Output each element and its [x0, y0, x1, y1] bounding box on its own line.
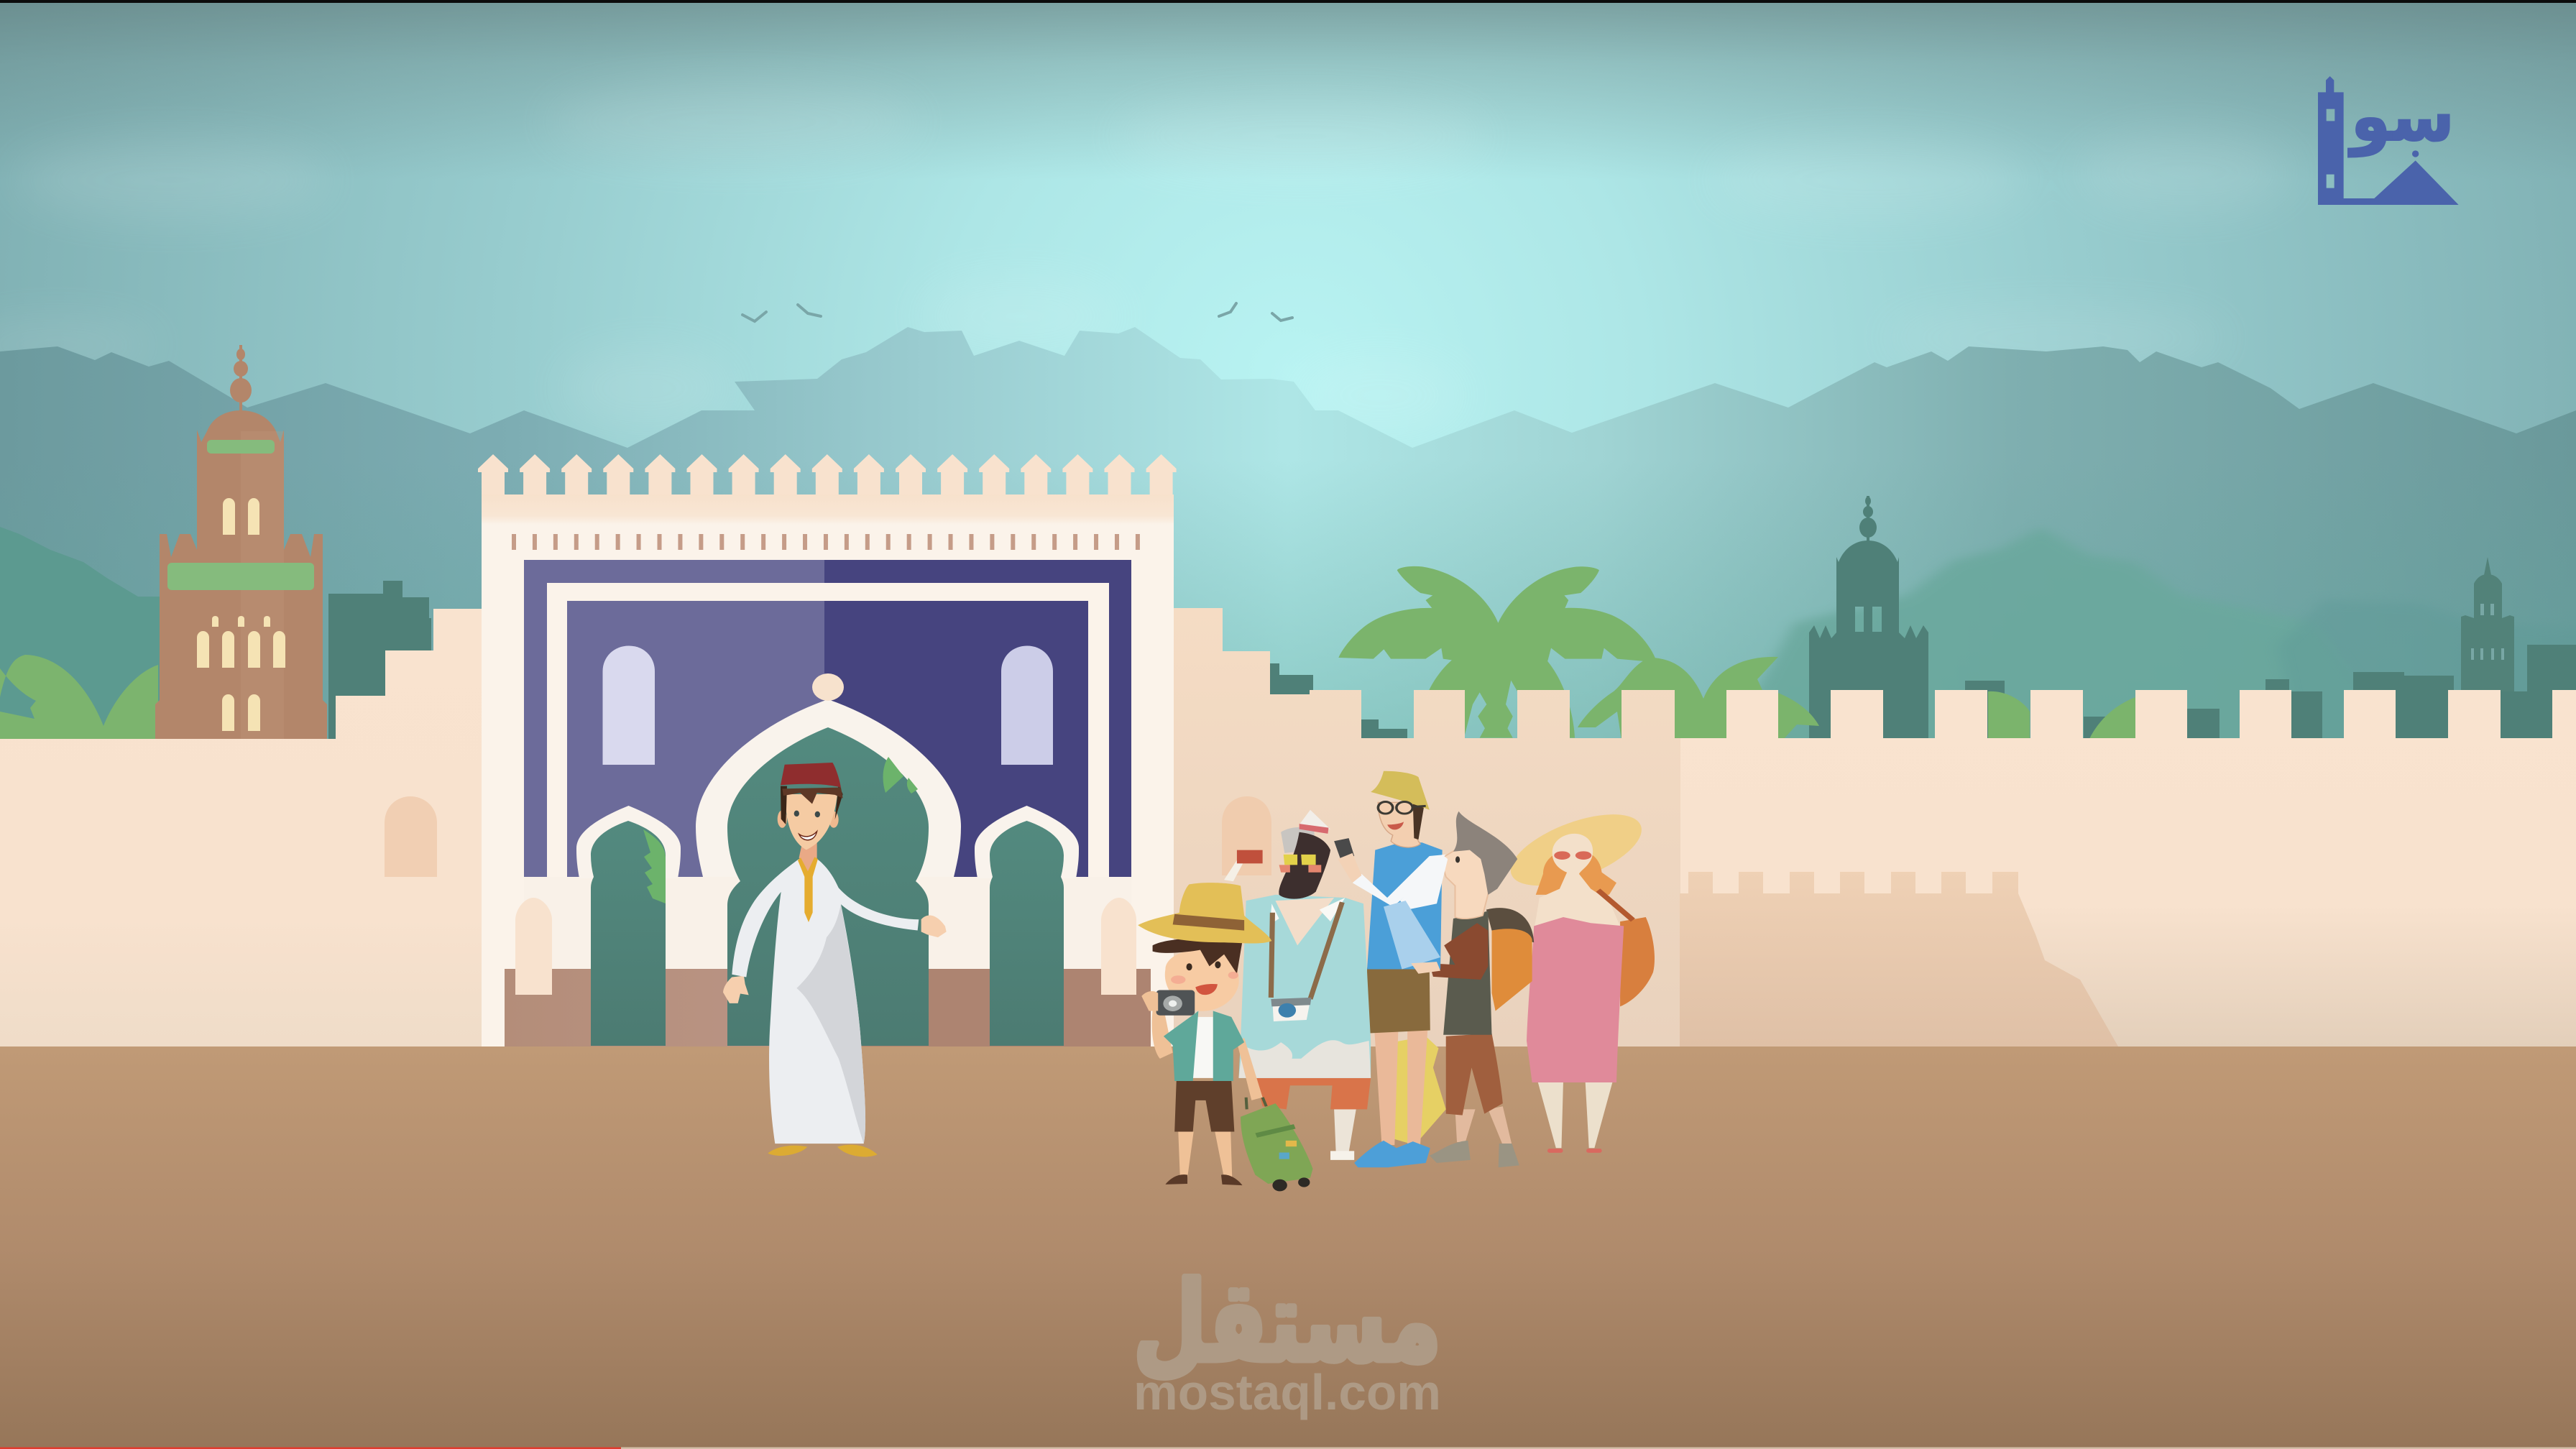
logo lettering: سو	[2348, 75, 2455, 157]
far right wall	[1653, 690, 2576, 1046]
tour guide	[723, 763, 947, 1157]
leaf in central doorway	[883, 757, 918, 794]
left palm leaves	[0, 655, 158, 740]
left doorway	[591, 821, 666, 1046]
gate niches	[515, 898, 1136, 995]
left wall	[0, 609, 489, 1046]
silhouette minaret far right	[2461, 557, 2514, 719]
tower body	[155, 410, 327, 739]
windows	[197, 498, 285, 731]
head	[778, 785, 843, 850]
fez hat	[781, 763, 841, 787]
second palm tree	[1578, 657, 1819, 740]
ground	[0, 1046, 2576, 1449]
hands	[723, 915, 947, 1003]
gate body	[482, 520, 1174, 1046]
mountain haze	[0, 460, 2576, 748]
watermark arabic: مستقل	[1133, 1259, 1441, 1386]
distant mountains	[0, 327, 2576, 791]
central arch	[524, 673, 1131, 969]
skyline buildings right	[1270, 645, 2576, 740]
yellow scarf	[1393, 1036, 1446, 1145]
cornice	[482, 494, 1174, 525]
shoes	[768, 1145, 878, 1157]
frieze ticks	[512, 534, 1140, 550]
bearded man	[1224, 810, 1371, 1160]
leaf in left doorway	[643, 829, 666, 903]
brown base	[505, 969, 1151, 1046]
backpacker	[1430, 811, 1534, 1167]
central doorway	[727, 727, 929, 1046]
watermark latin: mostaql.com	[1133, 1364, 1441, 1420]
suitcase	[1246, 1098, 1266, 1109]
logo	[2318, 75, 2459, 205]
niche right	[1222, 796, 1271, 875]
blue panel	[524, 560, 1131, 877]
video progress bar	[0, 1448, 2576, 1449]
niche left	[385, 796, 437, 877]
tourist group	[1138, 771, 1655, 1191]
side arch frames	[576, 806, 1079, 878]
birds	[742, 303, 1292, 321]
right doorway	[990, 821, 1064, 1046]
watermark	[1133, 1259, 1441, 1420]
right wall darker section	[1164, 608, 1680, 1046]
large palm tree	[1338, 566, 1655, 738]
green foothills left	[0, 527, 172, 748]
logo tower and roof	[2318, 76, 2459, 205]
green foothills right	[1712, 528, 2576, 748]
upper windows	[602, 645, 1053, 765]
neck and collar	[798, 841, 818, 922]
merlons	[478, 454, 1177, 495]
city wall	[0, 608, 2576, 1046]
silhouette minaret centre right	[1809, 496, 1928, 739]
sky background	[0, 0, 2576, 791]
boy with camera	[1138, 883, 1313, 1191]
robe fold	[796, 904, 865, 1144]
clouds	[0, 83, 2293, 435]
low inner wall	[1680, 872, 2118, 1046]
tall man with map	[1334, 771, 1448, 1167]
woman with sun hat	[1497, 800, 1655, 1153]
robe	[732, 859, 919, 1144]
top black edge	[0, 0, 2576, 3]
city gate	[478, 454, 1177, 1046]
skyline building left	[328, 581, 431, 740]
palm fragments	[1988, 691, 2135, 740]
green bands	[167, 440, 314, 590]
minaret left	[155, 345, 327, 739]
finial	[230, 345, 252, 411]
